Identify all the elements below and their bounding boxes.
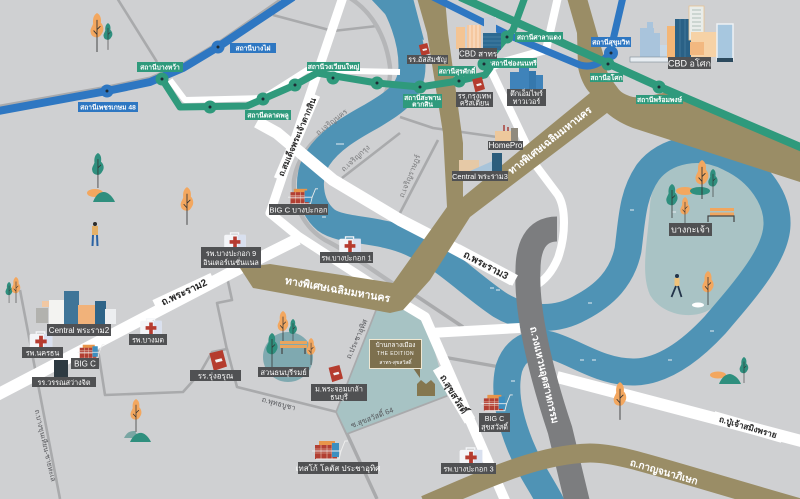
road label: Phutthabucha: ถ.พุทธบูชา [261, 395, 297, 412]
trees far west [6, 277, 20, 303]
KMUTT: ม.พระจอมเกล้า [315, 384, 363, 394]
CBD Asoke: CBD อโศก [668, 58, 711, 68]
Sala Daeng: สถานีศาลาแดง [517, 34, 561, 42]
road label: Pu Chao Saming Phrai [712, 411, 784, 443]
Bangmod [129, 334, 167, 345]
Saphan Taksin [403, 94, 442, 108]
Big C: BIG C [74, 360, 96, 368]
bench Bang Krachao [708, 208, 734, 222]
Bang Phai blue [230, 43, 276, 53]
CBD Sathorn: CBD สาทร [459, 50, 498, 58]
Empire Tower [510, 68, 543, 90]
Big C Suksawat [479, 413, 510, 432]
Talat Phlu: สถานีตลาดพลู [247, 112, 289, 121]
green rail line [156, 0, 800, 149]
CBD Asok towers [630, 6, 733, 62]
road label: Rama 2: ถ.พระราม2 [160, 277, 209, 308]
Saphan Taksin: สถานีสะพาน [404, 94, 441, 102]
tree cluster west [90, 13, 112, 52]
Talat Phlu [245, 110, 291, 121]
tan expressway: Chaloem Maha Nakhon [240, 0, 800, 313]
Surasak: สถานีสุรศักดิ์ [439, 67, 477, 76]
Central Rama 2: Central พระราม2 [49, 326, 110, 335]
road label: Pu Chao Saming Phrai: ถ.ปู่เจ้าสมิงพราย [718, 414, 778, 441]
Bangpakok 9: อินเตอร์เนชั่นแนล [203, 258, 259, 267]
road label: Suksawat: ถ.สุขสวัสดิ์ [437, 371, 472, 417]
Asok: สถานีอโศก [590, 73, 623, 82]
road label: Rama 2 [152, 273, 216, 311]
Phrom Phong: สถานีพร้อมพงษ์ [637, 95, 683, 104]
person west [92, 222, 98, 246]
Bangpakok 9: รพ.บางปะกอก 9 [206, 249, 256, 258]
tan road: Kanchanaphisek [425, 453, 800, 499]
Phetkasem 48 blue [78, 102, 138, 112]
HomePro store [495, 125, 518, 142]
Chong Nonsi: สถานีช่องนนทรี [491, 60, 537, 68]
Bangpakok 9 [201, 247, 261, 268]
road label: Rama 3: ถ.พระราม3 [461, 249, 510, 283]
Nakornthon [22, 347, 63, 358]
tree and bushes east [710, 357, 748, 384]
Bangkok Christian: คริสเตียน [460, 98, 489, 108]
Big C Bang Pakok: BIG C บางปะกอก [269, 206, 328, 214]
school icons [54, 43, 485, 382]
Central Rama 2 mall [36, 291, 116, 324]
Bang Wa: สถานีบางหว้า [140, 63, 180, 72]
Bang Krachao trees [666, 160, 718, 225]
Saphan Taksin: ตากสิน [412, 100, 433, 108]
Central Rama 3: Central พระราม3 [452, 172, 508, 181]
Bangpakok 3: รพ.บางปะกอก 3 [443, 464, 494, 474]
HomePro: HomePro [489, 141, 523, 150]
Thonburirom park circle [263, 332, 313, 382]
tree with bushes [87, 153, 115, 202]
trees and parks [6, 13, 748, 442]
station labels green [78, 32, 683, 121]
Bang Krachao green area [645, 158, 768, 315]
tree and cloud in park [692, 271, 714, 308]
Big C Suksawat: สุขสวัสดิ์ [481, 422, 509, 432]
site plot: The Edition [337, 308, 447, 433]
Bangkok Christian [456, 92, 493, 108]
minor roads [20, 0, 500, 499]
hospital icons [30, 233, 482, 466]
orange tree [181, 187, 193, 225]
KMUTT [311, 384, 367, 402]
gray industrial ring road [528, 229, 578, 499]
expressway label lower: ทางพิเศษเฉลิมมหานคร [284, 275, 391, 305]
person in park [672, 274, 682, 297]
road label: Soi Suksawat 64: ซ.สุขสวัสดิ์ 64 [349, 404, 395, 430]
tree with bushes south [124, 399, 151, 442]
Sukhumvit blue [591, 37, 631, 47]
river: Chao Phraya [310, 0, 777, 499]
Tesco Lotus: เทสโก้ โลตัส ประชาอุทิศ [296, 463, 380, 473]
project sign: The Edition [370, 340, 435, 396]
Wat Suwan: รร.วรรณสว่างจิต [38, 378, 91, 387]
Bang Krachao: บางกะเจ้า [671, 224, 710, 234]
Assumption: รร.อัสสัมชัญ [408, 55, 447, 64]
Nakornthon: รพ.นครธน [26, 348, 59, 358]
orange tree east [614, 382, 626, 420]
Empire Tower: ทาวเวอร์ [513, 97, 540, 106]
Bang Krachao [669, 223, 712, 236]
Roong Aroon: รร.รุ่งอรุณ [198, 372, 234, 380]
Surasak [438, 66, 477, 76]
Bangpakok 1: รพ.บางปะกอก 1 [321, 254, 372, 262]
project sign: The Edition: THE EDITION [377, 351, 414, 357]
Phetkasem 48 blue: สถานีเพชรเกษม 48 [80, 104, 136, 112]
road label: Industrial ring road: ถ.วงแหวนอุตสาหกรรม [527, 326, 560, 425]
road label: Bang Khun Thian: ถ.บางขุนเทียน-ชายทะเล [33, 409, 57, 482]
project sign: The Edition: สาทร-สุขสวัสดิ์ [379, 358, 413, 366]
Central Rama 3 mall [459, 153, 502, 171]
project sign: The Edition: บ้านกลางเมือง [376, 341, 415, 349]
place labels gray [22, 48, 712, 474]
Bangmod: รพ.บางมด [132, 336, 164, 344]
road label: Kanchanaphisek: ถ.กาญจนาภิเษก [629, 457, 699, 488]
KMUTT: ธนบุรี [330, 392, 348, 402]
road label: Rama 3 [454, 244, 518, 286]
Sala Daeng [515, 32, 563, 42]
Roong Aroon [190, 370, 241, 381]
blue rail line [0, 0, 623, 111]
road name plates and labels [33, 92, 784, 488]
road label: Charoen Krung: ถ.เจริญกรุง [339, 143, 372, 173]
Wongwian Yai: สถานีวงเวียนใหญ่ [308, 62, 359, 71]
Big C [71, 358, 99, 369]
Empire Tower: ตึกเอ็มไพร์ [510, 88, 543, 98]
CBD Sathorn towers [456, 17, 501, 50]
shopping cart icons [78, 189, 513, 459]
expressway label upper: ทางพิเศษเฉลิมมหานคร [506, 104, 595, 177]
Empire Tower [507, 88, 546, 106]
river ripples [322, 144, 714, 381]
Chong Nonsi [491, 58, 537, 68]
road label: Charoen Nakhon: ถ.เจริญนคร [314, 107, 349, 137]
Thonburirom park trees [266, 311, 315, 367]
Big C Suksawat: BIG C [485, 414, 504, 423]
Sukhumvit blue: สถานีสุขุมวิท [592, 39, 630, 47]
road label: Suksawat [432, 364, 476, 424]
road label: Somdet Phra Chao Taksin: ถ.สมเด็จพระเจ้าตากสิน [275, 96, 318, 178]
Thonburirom: สวนธนบุรีรมย์ [260, 368, 307, 377]
road label: Charoen Rat: ถ.เจริญราษฎร์ [397, 153, 422, 199]
road label: Pracha Uthit: ถ.ประชาอุทิศ [344, 318, 370, 360]
Bang Wa [137, 62, 183, 72]
Bangkok Christian: รร.กรุงเทพ [458, 92, 491, 100]
Bang Phai blue: สถานีบางไผ่ [235, 44, 271, 53]
